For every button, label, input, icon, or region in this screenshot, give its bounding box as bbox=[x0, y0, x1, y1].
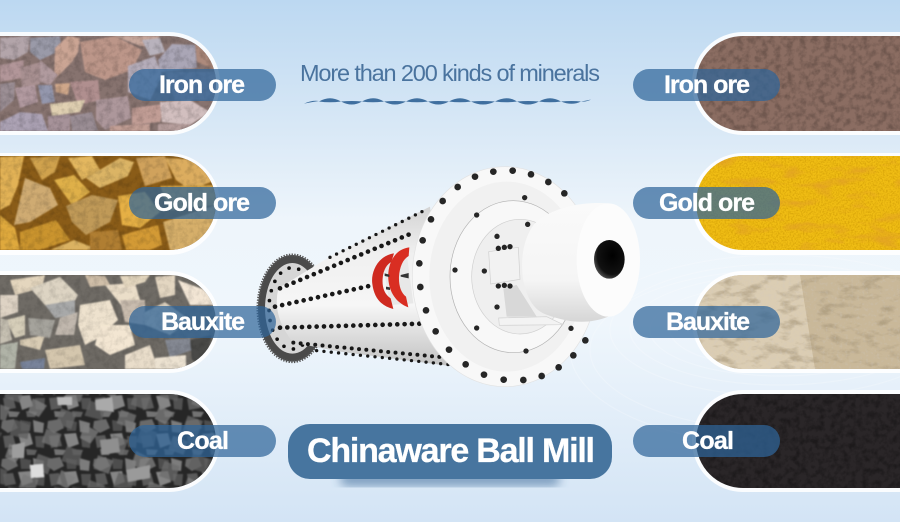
gear ring bbox=[258, 255, 327, 362]
label: gold ore (left): Gold ore bbox=[154, 189, 250, 217]
red ring clamps bbox=[372, 247, 413, 309]
label: coal (left): Coal bbox=[177, 427, 229, 455]
label: bauxite (left): Bauxite bbox=[161, 308, 245, 336]
panel: bauxite powder (right) bbox=[690, 271, 900, 373]
end flange bbox=[412, 167, 598, 387]
label: gold ore (right) bbox=[633, 187, 780, 219]
label: coal (right): Coal bbox=[682, 427, 734, 455]
panel: gold ore powder (right) bbox=[690, 153, 900, 255]
bearing support bbox=[489, 244, 563, 325]
label: gold ore (right): Gold ore bbox=[659, 189, 755, 217]
label: iron ore (right) bbox=[633, 69, 780, 101]
label: iron ore (right): Iron ore bbox=[664, 71, 750, 99]
discharge opening bbox=[594, 240, 625, 279]
panel: coal rocks (left) bbox=[0, 390, 220, 492]
panel: bauxite rocks (left) bbox=[0, 271, 220, 373]
flange bolts bbox=[416, 167, 589, 383]
label: iron ore (left) bbox=[129, 69, 276, 101]
illustration: ball mill bbox=[258, 167, 640, 387]
title badge: Chinaware Ball Mill bbox=[288, 424, 612, 486]
panel: coal powder (right) bbox=[690, 390, 900, 492]
label: coal (right) bbox=[633, 425, 780, 457]
wavy underline bbox=[304, 98, 591, 104]
label: gold ore (left) bbox=[129, 187, 276, 219]
label: coal (left) bbox=[129, 425, 276, 457]
label: bauxite (right): Bauxite bbox=[666, 308, 750, 336]
title badge: Chinaware Ball Mill: Chinaware Ball Mill bbox=[307, 432, 595, 470]
label: bauxite (left) bbox=[129, 306, 276, 338]
heading: more than 200 kinds of minerals: More than 200 kinds of minerals bbox=[300, 60, 600, 86]
panel: iron ore rocks (left) bbox=[0, 32, 220, 135]
panel: iron ore powder (right) bbox=[690, 32, 900, 135]
label: bauxite (right) bbox=[633, 306, 780, 338]
discharge cone bbox=[522, 203, 640, 322]
label: iron ore (left): Iron ore bbox=[159, 71, 245, 99]
panel: gold ore rocks (left) bbox=[0, 153, 220, 255]
bolt rows on shell bbox=[275, 209, 450, 365]
mill shell bbox=[277, 207, 450, 366]
